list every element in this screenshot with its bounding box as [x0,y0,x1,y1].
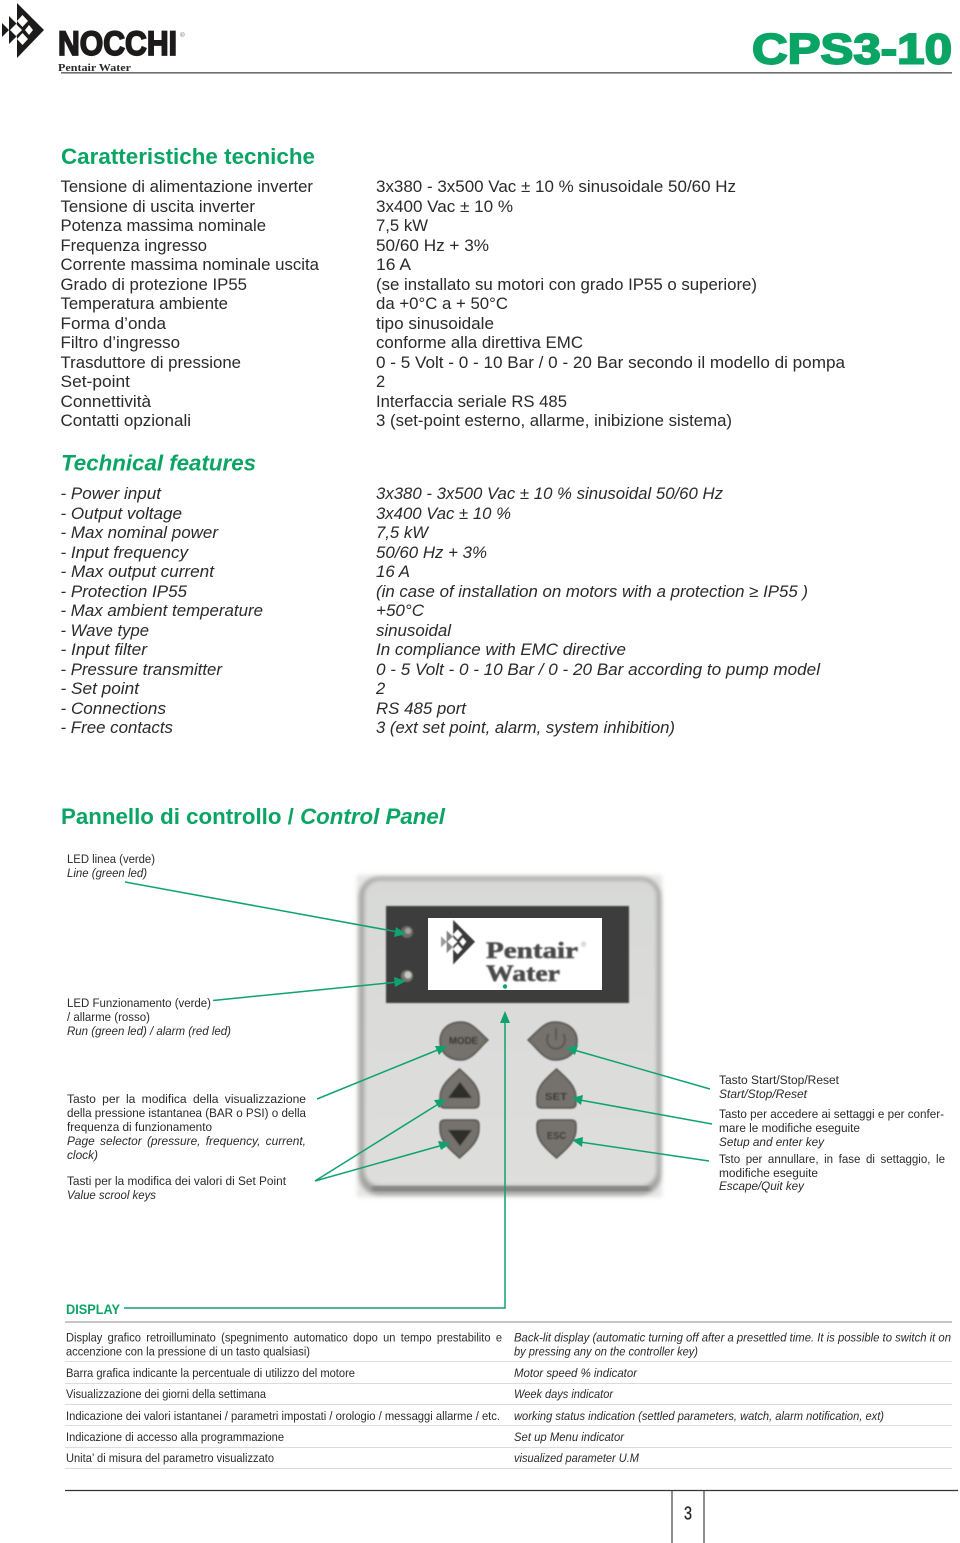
leader: power arrow [566,1045,710,1089]
English specs: labels: - Power input [60,485,162,503]
English specs: labels: - Output voltage [60,505,182,523]
English specs: values: 2 [375,680,385,698]
English specs: labels: - Pressure transmitter [60,661,224,679]
Italian specs: labels: Potenza massima nominale [60,217,266,235]
Italian descriptions: Visualizzazione dei giorni della settimana [66,1387,266,1401]
Italian specs: values: tipo sinusoidale [376,315,494,333]
label: MODE key [67,1092,306,1162]
English descriptions: working status indication (settled parameters, watch, alarm notification, ext) [514,1409,884,1423]
label: LED line [67,852,155,880]
English specs: values: (in case of installation on motors with a protection ≥ IP55 ) [376,583,808,601]
label: LED run / alarm [67,996,231,1038]
Italian specs: labels: Filtro d’ingresso [60,334,180,352]
Italian specs: values: Interfaccia seriale RS 485 [376,393,567,411]
Italian specs: labels: Trasduttore di pressione [60,354,241,372]
screen logo text [486,938,587,986]
English specs: values: 7,5 kW [376,524,429,542]
Italian specs: values: 0 - 5 Volt - 0 - 10 Bar / 0 - 20 Bar secondo il modello di pompa [376,354,846,372]
English specs: labels: - Wave type [60,622,149,640]
label: Start/Stop/Reset: Tasto Start/Stop/Reset [719,1073,840,1087]
Italian descriptions: accenzione con la pressione di un tasto qualsiasi) [66,1344,310,1358]
button: SET: SET [545,1091,568,1103]
button: power [528,1022,577,1060]
screen logo text: Pentair [486,938,578,963]
Italian specs: values [376,178,846,430]
table rules [65,1322,952,1468]
English specs: values: In compliance with EMC directive [376,641,626,659]
Italian specs: labels: Forma d’onda [60,315,167,333]
Italian specs: values: da +0°C a + 50°C [376,295,508,313]
Italian specs: values: 2 [376,373,385,391]
label: ESC key [719,1152,945,1193]
Italian specs: labels [60,178,320,430]
Italian specs: labels: Tensione di alimentazione inverter [60,178,314,196]
label: SET key: Tasto per accedere ai settaggi e per confer- [719,1107,944,1121]
English descriptions: by pressing any on the controller key) [514,1344,698,1358]
display bezel [386,906,629,1003]
icon: diamond fish mark [2,3,44,58]
leader: up/down key arrows [315,1099,451,1181]
English descriptions: Week days indicator [514,1387,614,1401]
LED: line [401,926,413,938]
label: ESC key: Tsto per annullare, in fase di settaggio, le [719,1152,945,1166]
label: Start/Stop/Reset: Start/Stop/Reset [719,1087,808,1101]
English specs: labels: - Max ambient temperature [60,602,263,620]
Italian specs: values: 50/60 Hz + 3% [376,237,489,255]
Italian descriptions: Unita’ di misura del parametro visualizzato [66,1451,274,1465]
heading: Technical features: Technical features [61,450,256,476]
button: ESC [537,1120,576,1158]
Italian specs: values: (se installato su motori con grado IP55 o superiore) [376,276,757,294]
leader: LED run arrow [213,977,406,1000]
Italian specs: labels: Frequenza ingresso [60,237,207,255]
label: LED run / alarm: Run (green led) / alarm (red led) [67,1024,231,1038]
Italian descriptions: Indicazione dei valori istantanei / parametri impostati / orologio / messaggi allarme / etc. [66,1409,500,1423]
English specs: values: sinusoidal [376,622,452,640]
Italian specs: values: 7,5 kW [376,217,428,235]
label: LED run / alarm: / allarme (rosso) [67,1010,150,1024]
wordmark: NOCCHI [58,25,177,63]
label: SET key: mare le modifiche eseguite [719,1121,860,1135]
heading: DISPLAY: DISPLAY [66,1302,120,1317]
English specs: labels: - Free contacts [60,719,173,737]
Italian specs: labels: Corrente massima nominale uscita [60,256,320,274]
model title: CPS3-10 [752,26,952,74]
English descriptions: Motor speed % indicator [514,1366,638,1380]
leader: display arrow and DISPLAY bracket [124,1011,510,1308]
button: ESC: ESC [547,1131,566,1142]
English specs: labels: - Max nominal power [60,524,220,542]
sub-brand: Pentair Water [58,63,131,74]
button: MODE [440,1022,488,1060]
label: LED line: Line (green led) [67,866,147,880]
label: MODE key: frequenza di funzionamento [67,1120,212,1134]
Italian descriptions: Display grafico retroilluminato (spegnimento automatico dopo un tempo prestabilito e [66,1330,502,1344]
heading: Caratteristiche tecniche: Caratteristiche tecniche [61,144,315,169]
label: value keys [67,1174,287,1202]
logo: Nocchi Pentair Water [2,3,185,74]
Italian specs: values: conforme alla direttiva EMC [376,334,583,352]
label: MODE key: Tasto per la modifica della visualizzazione [67,1092,306,1106]
Italian specs: labels: Grado di protezione IP55 [60,276,247,294]
display marker dot [503,984,507,989]
control panel device [357,875,662,1197]
label: value keys: Tasti per la modifica dei valori di Set Point [67,1174,287,1188]
English specs: labels: - Protection IP55 [60,583,188,601]
English specs: values: +50°C [376,602,424,620]
leader: ESC arrow [572,1137,709,1161]
Italian descriptions: Barra grafica indicante la percentuale di utilizzo del motore [66,1366,355,1380]
label: ESC key: modifiche eseguite [719,1166,818,1180]
registered mark: ® [180,31,185,39]
label: MODE key: clock) [67,1148,98,1162]
leader: LED line arrow [125,882,406,937]
English specs: labels: - Input filter [60,641,149,659]
label: ESC key: Escape/Quit key [719,1179,805,1193]
label: LED run / alarm: LED Funzionamento (verde) [67,996,211,1010]
English specs: values: 3x380 - 3x500 Vac ± 10 % sinusoidal 50/60 Hz [376,485,724,503]
label: MODE key: Page selector (pressure, frequency, current, [67,1134,306,1148]
screen logo: Pentair Water [441,920,587,986]
Italian descriptions [66,1330,502,1465]
Italian specs: values: 3x400 Vac ± 10 % [376,198,513,216]
Italian specs: values: 3 (set-point esterno, allarme, inibizione sistema) [376,412,732,430]
Italian specs: labels: Set-point [60,373,130,391]
Italian specs: labels: Connettività [60,393,152,411]
display screen [428,918,602,990]
Italian specs: labels: Tensione di uscita inverter [60,198,256,216]
Italian specs: labels: Contatti opzionali [60,412,191,430]
English descriptions [514,1330,951,1465]
label: SET key [719,1107,944,1149]
English specs: values [375,485,821,737]
label: LED line: LED linea (verde) [67,852,155,866]
English specs: labels: - Set point [60,680,140,698]
English specs: values: 50/60 Hz + 3% [376,544,487,562]
button: up [440,1069,479,1108]
screen logo text: Water [486,961,560,986]
header rule [61,72,952,74]
English specs: values: 3 (ext set point, alarm, system inhibition) [376,719,675,737]
Italian specs: values: 16 A [376,256,411,274]
leader: MODE arrow [317,1046,447,1099]
English specs: labels [60,485,263,737]
label: MODE key: della pressione istantanea (BAR o PSI) o della [67,1106,306,1120]
button: down [440,1120,479,1158]
label: SET key: Setup and enter key [719,1135,825,1149]
English descriptions: Set up Menu indicator [514,1430,625,1444]
label: value keys: Value scrool keys [67,1188,156,1202]
Italian specs: labels: Temperatura ambiente [60,295,228,313]
button: MODE: MODE [449,1036,478,1047]
panel body [357,875,662,1197]
page number: 3 [684,1504,692,1524]
label: Start/Stop/Reset [719,1073,840,1101]
display table [65,1322,952,1468]
English specs: values: RS 485 port [376,700,467,718]
icon: diamond mark [441,920,475,964]
button: SET [537,1069,576,1108]
leader: SET arrow [572,1095,712,1124]
English specs: values: 16 A [376,563,410,581]
English specs: values: 0 - 5 Volt - 0 - 10 Bar / 0 - 20 Bar according to pump model [376,661,821,679]
LED: run [401,970,413,982]
English specs: labels: - Max output current [60,563,215,581]
screen logo text: ® [581,941,587,949]
Italian specs: values: 3x380 - 3x500 Vac ± 10 % sinusoidale 50/60 Hz [376,178,736,196]
heading: Pannello di controllo / Control Panel: Pannello di controllo / Control Panel [61,804,446,829]
English descriptions: visualized parameter U.M [514,1451,640,1465]
English specs: labels: - Input frequency [60,544,190,562]
English specs: labels: - Connections [60,700,166,718]
Italian descriptions: Indicazione di accesso alla programmazione [66,1430,284,1444]
English specs: values: 3x400 Vac ± 10 % [376,505,511,523]
